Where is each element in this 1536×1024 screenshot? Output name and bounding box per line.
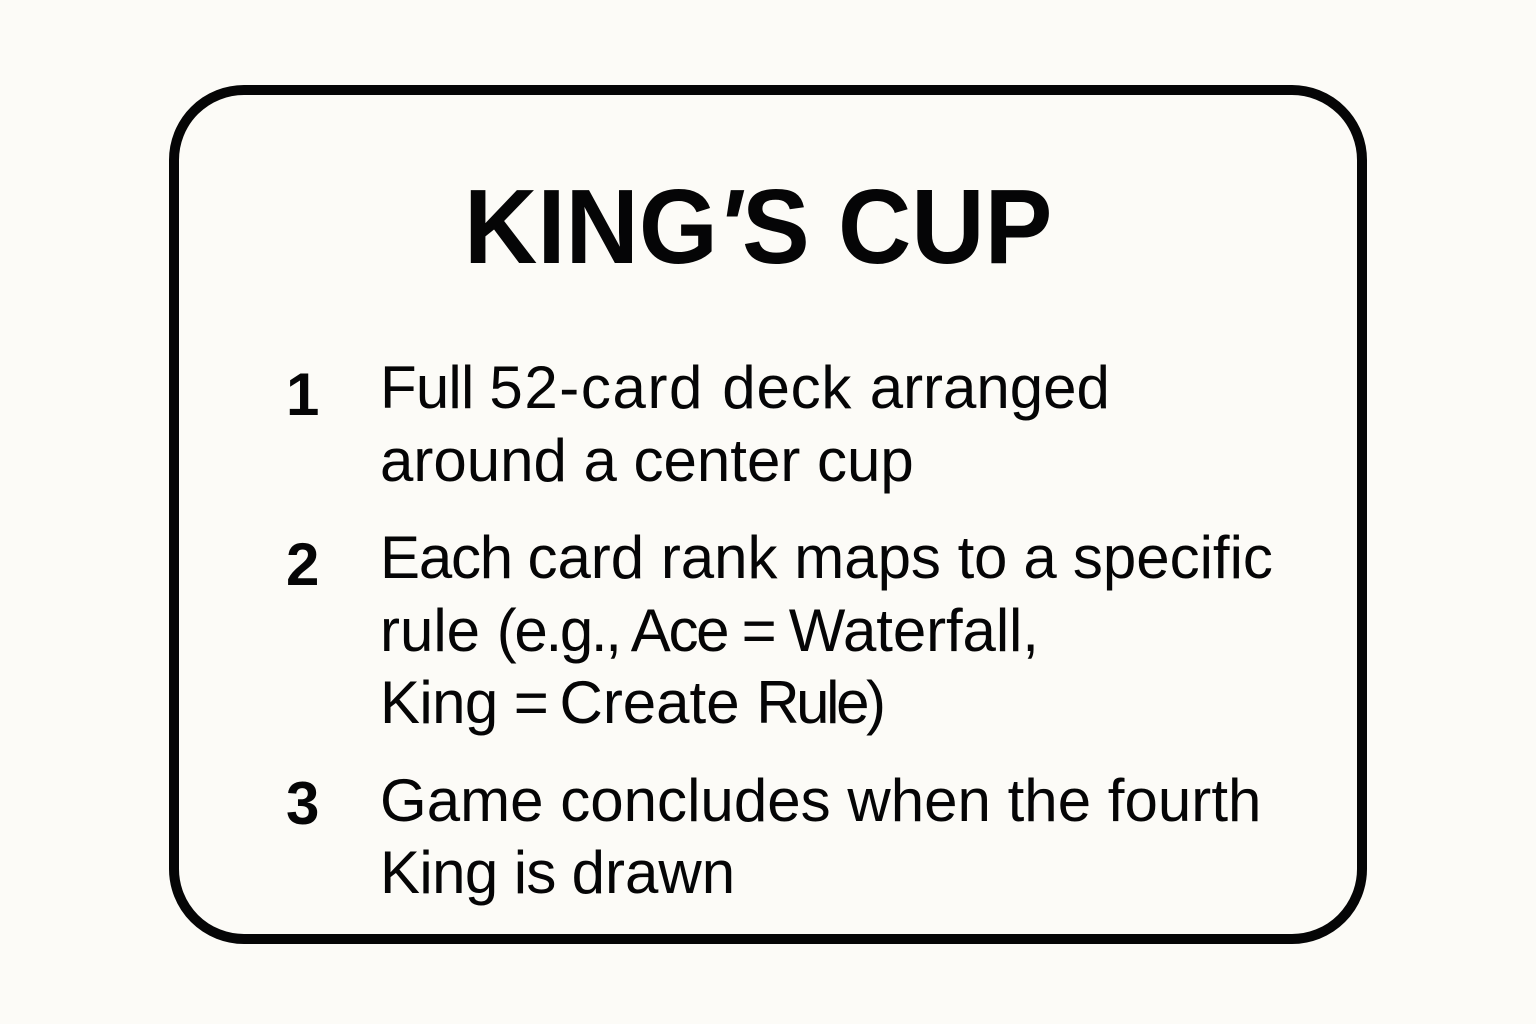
step 2 text: rule (e.g., Ace = Waterfall, [380, 597, 1039, 664]
step 2 text: King = Create Rule) [380, 669, 883, 736]
step 2 text [380, 524, 1273, 736]
step 3 number: 3 [286, 770, 319, 837]
step 3 text [380, 767, 1261, 906]
title: KINGS CUP [464, 168, 1052, 286]
step 1 text: Full 52-card deck arranged [380, 354, 1110, 421]
step 3 text: Game concludes when the fourth [380, 767, 1261, 834]
step 1 text [380, 354, 1110, 494]
card panel [169, 85, 1367, 944]
step 3 text: King is drawn [380, 839, 735, 906]
title: ' [706, 168, 754, 286]
step 1 text: around a center cup [380, 427, 914, 494]
step 2 number: 2 [286, 531, 319, 598]
step 2 text: Each card rank maps to a specific [380, 524, 1273, 591]
step 1 number: 1 [286, 361, 319, 428]
